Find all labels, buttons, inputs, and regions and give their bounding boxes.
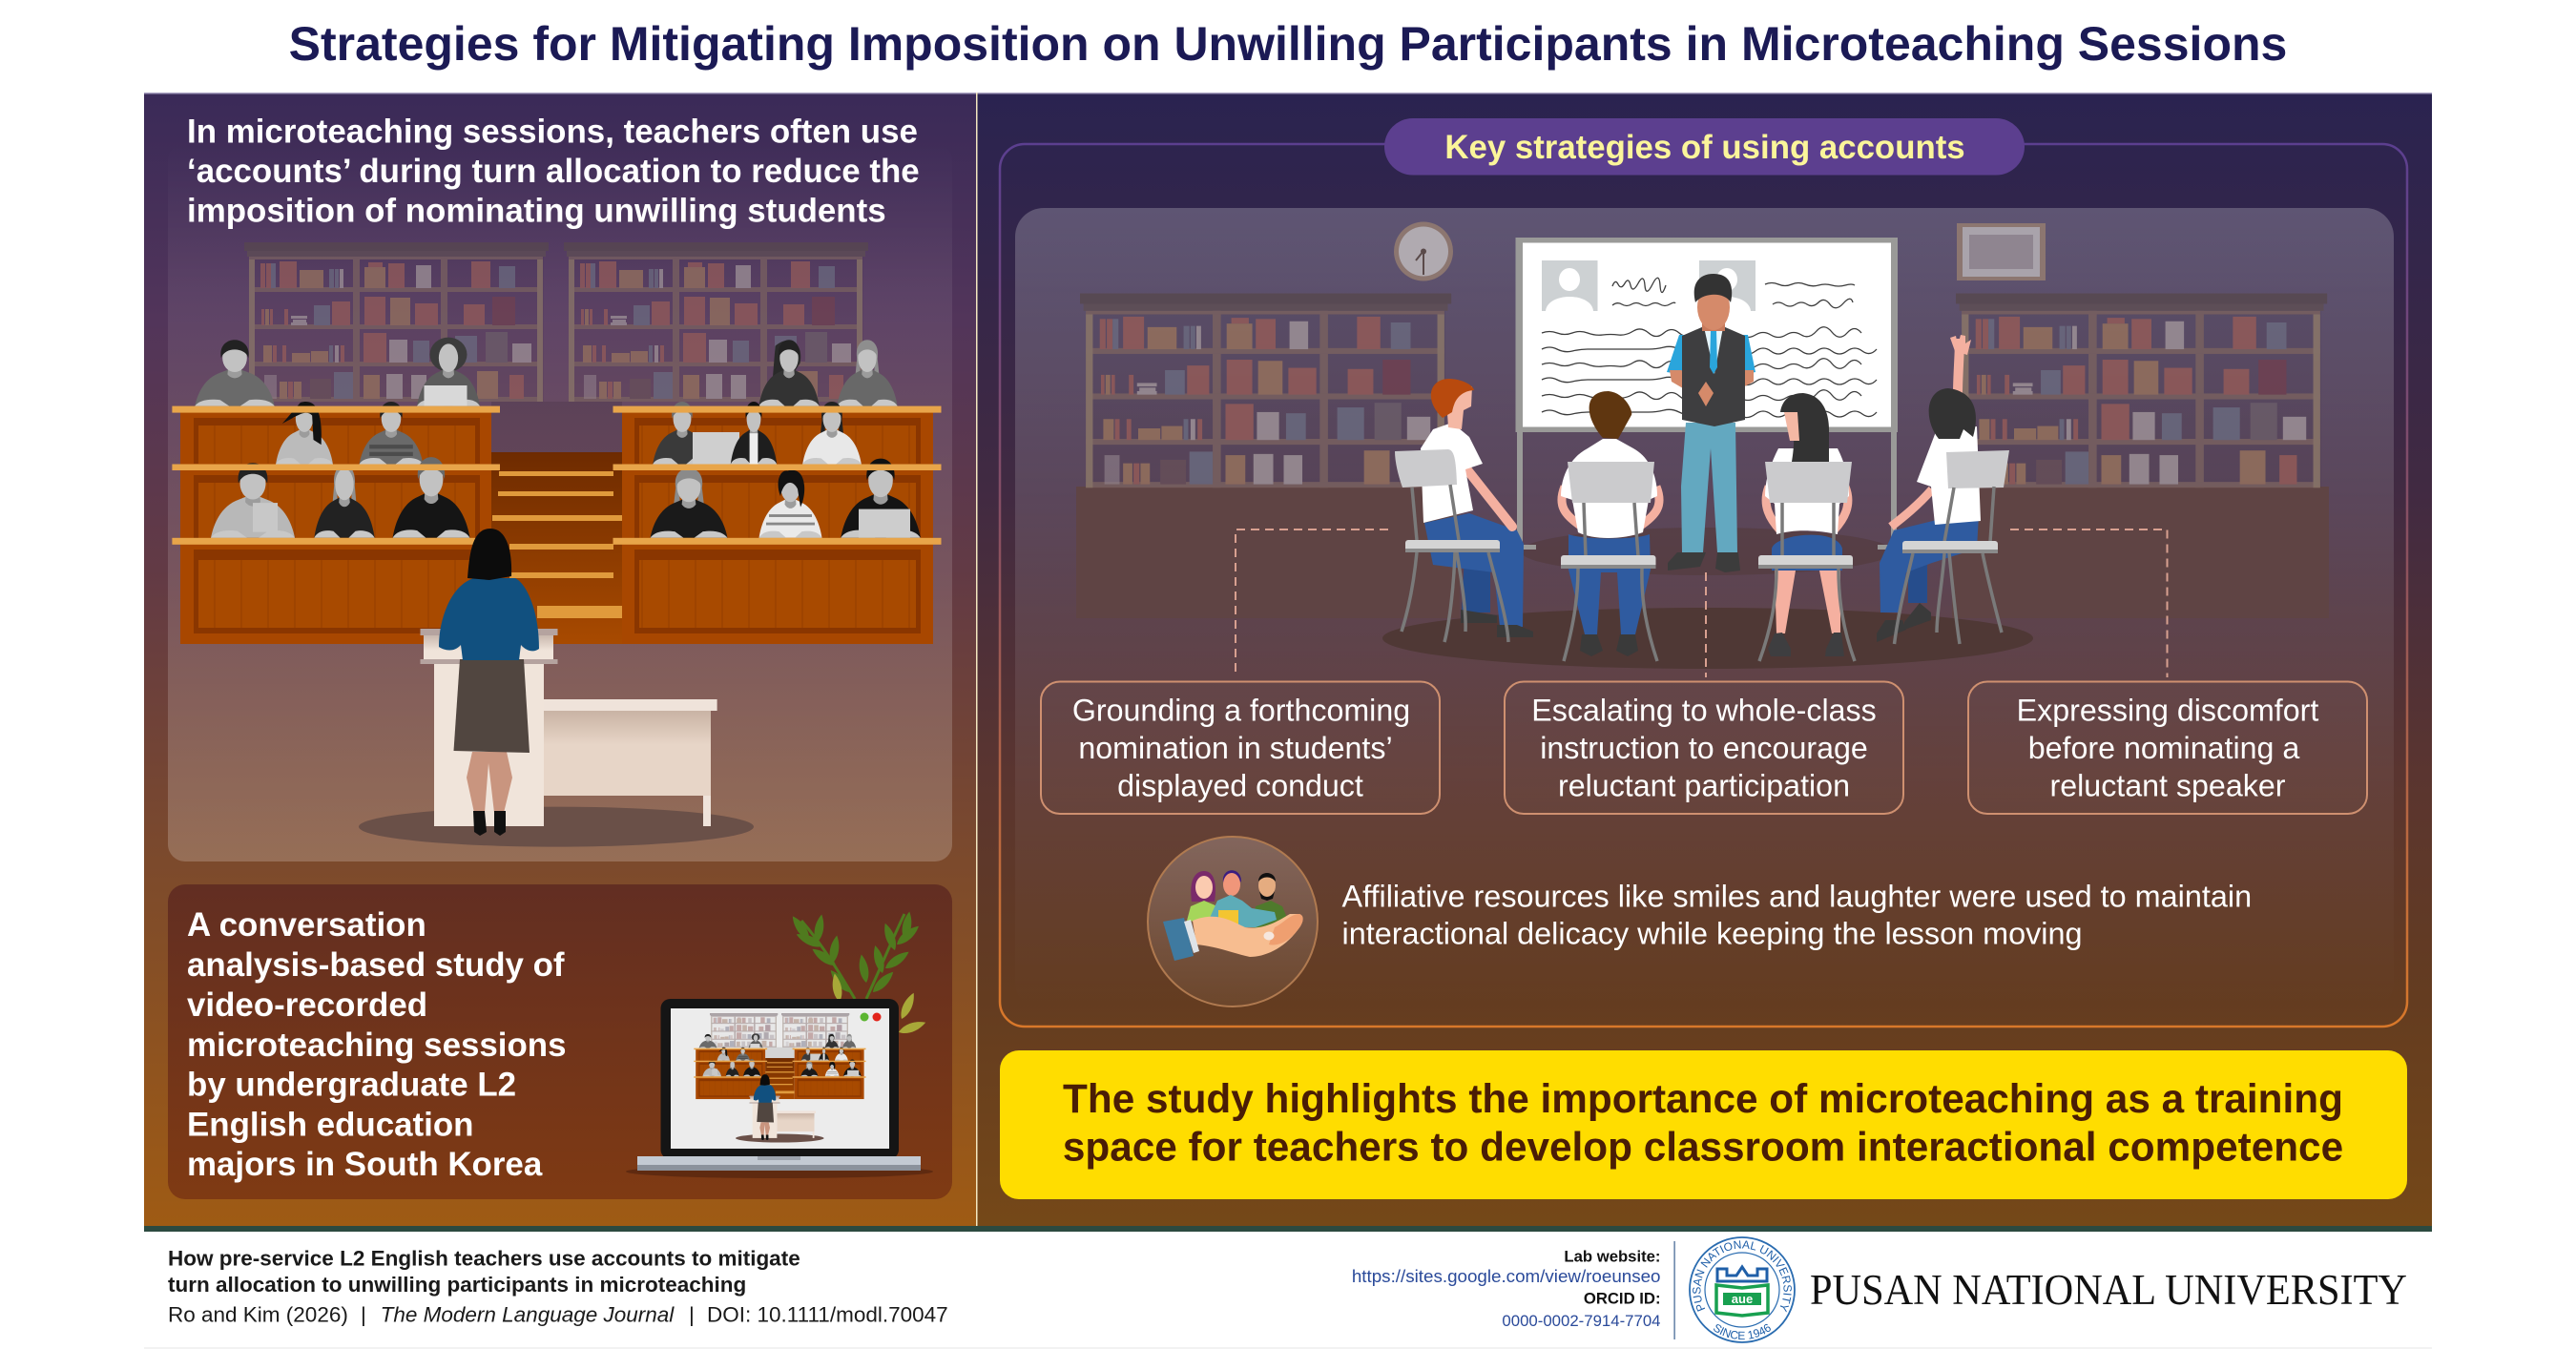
text: study description: analysis-based study of: [187, 946, 565, 984]
callout: conclusion: space for teachers to develop classroom interactional competence: [1063, 1124, 2343, 1170]
text: affiliative resources: [1341, 880, 2252, 951]
dashed connectors: [1236, 529, 2168, 677]
panel: classroom and strategies: [1015, 208, 2394, 1011]
strategy box 2: instruction to encourage: [1540, 731, 1868, 765]
text: study description: video-recorded: [187, 986, 427, 1024]
text: affiliative resources: Affiliative resources like smiles and laughter were used to maintain: [1341, 880, 2252, 914]
presenting teacher: [1667, 274, 1755, 572]
strategy box 1: Grounding a forthcoming: [1072, 693, 1410, 727]
callout: conclusion: The study highlights the importance of microteaching as a training: [1063, 1076, 2343, 1121]
whiteboard: [1515, 238, 1898, 550]
lab website and ORCID: Lab website:: [1564, 1248, 1660, 1266]
panel: strategies outline box: [1000, 144, 2407, 1027]
text: study description: by undergraduate L2: [187, 1067, 516, 1103]
citation block: [168, 1247, 948, 1327]
heading: introduction: In microteaching sessions, teachers often use: [187, 113, 918, 150]
strategy box 1: displayed conduct: [1117, 769, 1363, 803]
text: study description: majors in South Korea: [187, 1146, 543, 1183]
bookshelf right: [1952, 294, 2329, 618]
wordmark: Pusan National University: PUSAN NATIONAL UNIVERSITY: [1810, 1266, 2407, 1314]
icon: laptop showing the classroom: [626, 999, 933, 1178]
heading: introduction: imposition of nominating unwilling students: [187, 193, 886, 230]
icon: hand holding people: [1148, 837, 1318, 1007]
panel: left column background: [144, 93, 977, 1226]
callout: conclusion: [1000, 1050, 2407, 1199]
logo: Pusan National University seal: aue: [1732, 1292, 1753, 1306]
panel: right column background: [976, 93, 2432, 1226]
heading: introduction: ‘accounts’ during turn allocation to reduce the: [187, 153, 920, 190]
panel: study description: [168, 884, 952, 1199]
panel: lecture hall illustration: [168, 143, 952, 861]
text: affiliative resources: interactional delicacy while keeping the lesson moving: [1341, 917, 2083, 951]
citation block: The Modern Language Journal: [381, 1303, 675, 1327]
citation block: |: [689, 1303, 695, 1327]
strategy box 3: [1968, 681, 2367, 814]
citation block: Ro and Kim (2026): [168, 1303, 348, 1327]
citation block: DOI: 10.1111/modl.70047: [707, 1303, 948, 1327]
citation block: turn allocation to unwilling participants in microteaching: [168, 1273, 746, 1297]
citation block: |: [361, 1303, 366, 1327]
lab website and ORCID: 0000-0002-7914-7704: [1502, 1312, 1660, 1330]
icon: plant: [789, 911, 927, 1036]
strategy box 3: reluctant speaker: [2050, 769, 2286, 803]
strategy box 1: nomination in students’: [1078, 731, 1393, 765]
lab website and ORCID: ORCID ID:: [1584, 1290, 1660, 1308]
citation block: How pre-service L2 English teachers use accounts to mitigate: [168, 1247, 800, 1271]
lab website and ORCID: [1352, 1241, 1675, 1339]
strategy box 2: Escalating to whole-class: [1531, 693, 1877, 727]
student 2 with brown hair: [1561, 391, 1659, 661]
heading pill: key strategies: [1384, 118, 2025, 176]
bookshelves: [244, 242, 868, 402]
strategy box 3: before nominating a: [2028, 731, 2299, 765]
icon: picture frame: [1957, 223, 2046, 280]
heading pill: key strategies: Key strategies of using accounts: [1444, 129, 1965, 166]
text: study description: microteaching sessions: [187, 1027, 567, 1064]
strategy box 2: [1505, 681, 1903, 814]
lecture hall scene with students and teacher: [172, 338, 941, 847]
student 3 with long black hair: [1758, 393, 1855, 661]
logo: Pusan National University seal: SINCE 1946: [1714, 1324, 1771, 1339]
icon: wall clock: [1394, 221, 1453, 280]
text: study description: English education: [187, 1107, 473, 1143]
heading: introduction: [187, 113, 920, 230]
student 4 raising a hand: [1877, 335, 2009, 644]
lab website and ORCID: https://sites.google.com/view/roeunseo: [1352, 1266, 1660, 1286]
strategy box 3: Expressing discomfort: [2017, 693, 2318, 727]
student 1 with red hair: [1395, 379, 1533, 642]
title: Strategies for Mitigating Imposition on Unwilling Participants in Microteaching Sessions: [289, 17, 2287, 71]
text: study description: [187, 906, 567, 1183]
text: study description: A conversation: [187, 906, 426, 944]
strategy box 1: [1041, 681, 1440, 814]
strategy box 2: reluctant participation: [1558, 769, 1850, 803]
bookshelf left: [1076, 294, 1460, 618]
logo: Pusan National University seal: PUSAN NATIONAL UNIVERSITY: [1693, 1240, 1792, 1313]
classroom floor shadow: [1382, 608, 2033, 669]
logo: Pusan National University seal: [1689, 1236, 1796, 1343]
